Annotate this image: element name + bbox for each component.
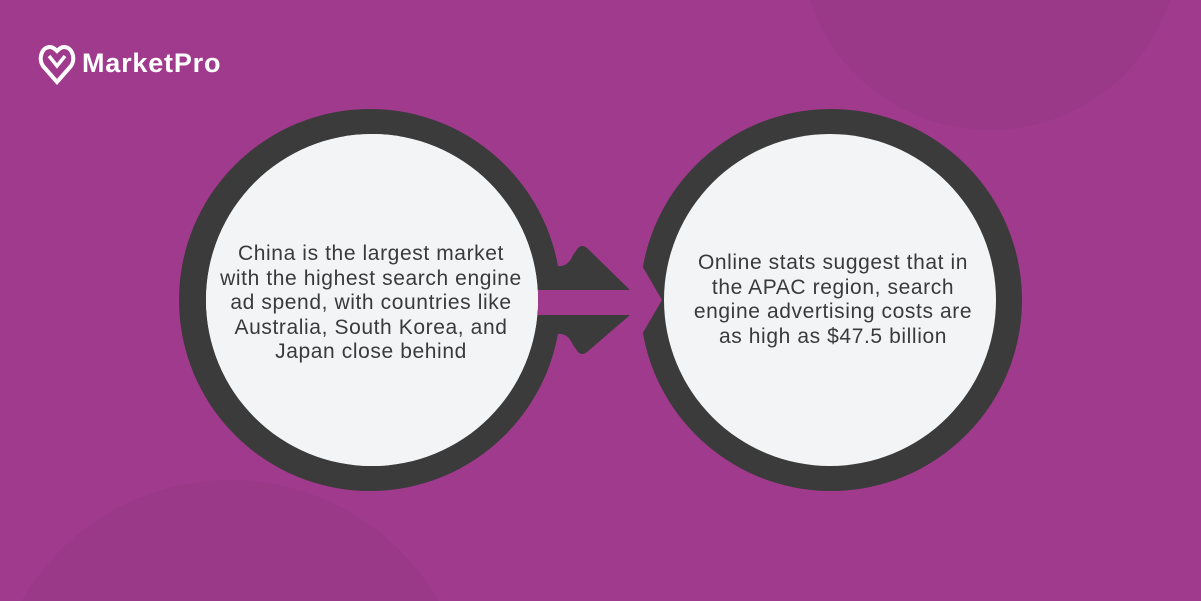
left text: ad spend, with countries like (230, 291, 512, 314)
right text (694, 251, 972, 348)
right text: the APAC region, search (712, 276, 954, 298)
right text: Online stats suggest that in (698, 251, 968, 274)
left text: China is the largest market (238, 242, 504, 265)
left ring (179, 109, 561, 491)
left text (220, 242, 522, 363)
logo: MarketPro (82, 48, 221, 78)
right ring (630, 109, 1022, 491)
logo (38, 45, 221, 85)
right text: as high as $47.5 billion (719, 324, 947, 348)
arrow lower (545, 315, 630, 354)
left text: Japan close behind (275, 340, 467, 363)
left text: with the highest search engine (220, 266, 522, 290)
left text: Australia, South Korea, and (234, 316, 508, 338)
right text: engine advertising costs are (694, 300, 972, 323)
arrow upper (545, 246, 630, 290)
